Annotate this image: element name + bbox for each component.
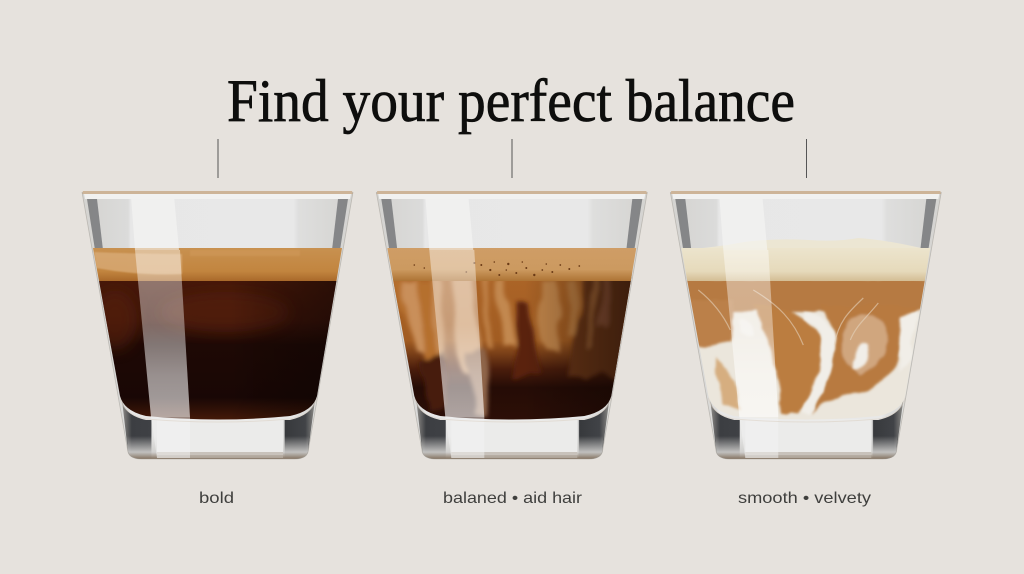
glass: balanced marbled coffee xyxy=(376,191,647,459)
connector line: smooth xyxy=(806,139,807,178)
title: Find your perfect balance xyxy=(227,68,795,134)
coffee swirl xyxy=(680,278,932,414)
glass: smooth milky coffee xyxy=(670,191,941,459)
connector line: balanced xyxy=(512,139,513,178)
label: bold: bold xyxy=(199,490,234,507)
milk ribbons xyxy=(800,308,920,414)
marbled streaks xyxy=(394,278,634,412)
connector line: bold xyxy=(218,139,219,178)
foam dome xyxy=(680,238,929,250)
label: balanced: balaned • aid hair xyxy=(443,490,583,507)
glass: bold black coffee xyxy=(82,191,353,459)
crema bubbles xyxy=(414,261,580,276)
label: smooth velvety: smooth • velvety xyxy=(738,490,871,507)
